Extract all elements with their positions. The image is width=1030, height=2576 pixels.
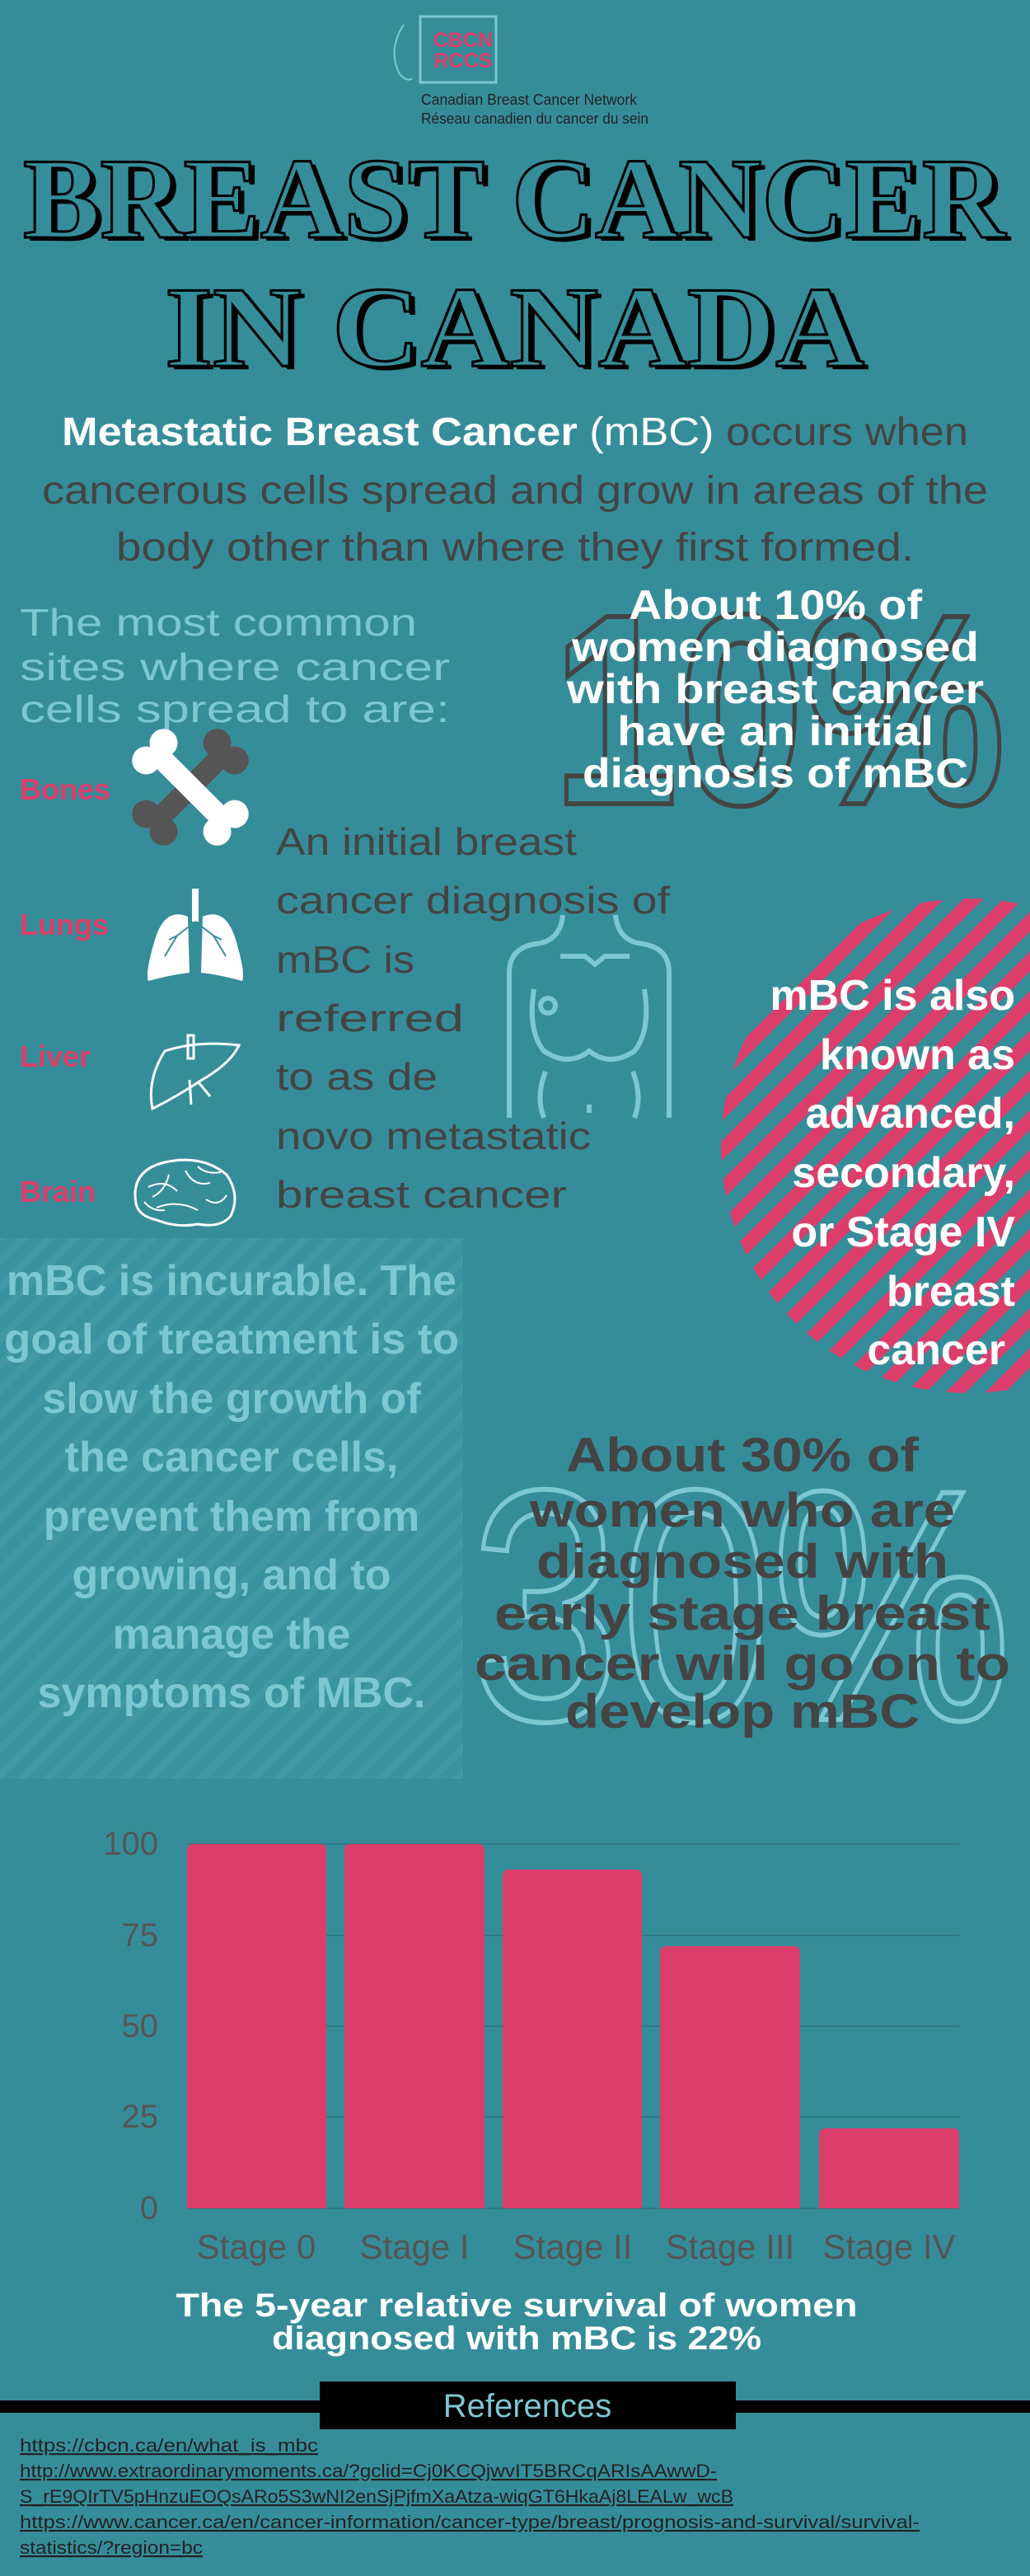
title [23,135,1012,395]
title: BREAST CANCER [28,138,1012,266]
bar chart: 50 [122,2008,158,2044]
common sites heading: cells spread to are: [20,687,450,730]
bar chart [103,1826,959,2266]
icon: liver [151,1035,239,1109]
icon: torso outline [509,915,669,1118]
references list [20,2435,920,2558]
panel: incurable: the cancer cells, [65,1433,398,1481]
logo: Canadian Breast Cancer Network [421,91,638,108]
bar chart: 0 [140,2190,158,2226]
panel: incurable: mBC is incurable. The [7,1257,456,1305]
bar chart: 75 [122,1917,158,1954]
intro text [42,411,988,570]
references list: http://www.extraordinarymoments.ca/?gclid=Cj0KCQjwvIT5BRCqARIsAAwwD- [20,2461,717,2481]
bar chart: Stage IV [822,2227,956,2266]
title: IN CANADA [170,267,869,395]
references list: https://cbcn.ca/en/what_is_mbc [20,2435,318,2456]
30% callout text [475,1429,1010,1738]
intro text: Metastatic Breast Cancer (mBC) occurs when [62,411,968,454]
bar chart: 25 [122,2099,158,2135]
de novo text: An initial breast [276,820,577,863]
striped circle with also-known-as text [721,899,1030,1393]
striped circle with also-known-as text: mBC is also [770,972,1015,1020]
logo: CBCN [433,29,493,52]
intro text: cancerous cells spread and grow in areas of the [42,469,988,513]
logo: RCCS [434,49,492,73]
de novo text: to as de [276,1055,438,1098]
striped circle with also-known-as text: cancer [867,1326,1005,1374]
de novo text: breast cancer [276,1173,567,1216]
de novo text: cancer diagnosis of [276,879,670,922]
30% callout text: diagnosed with [536,1535,948,1588]
common sites heading: The most common [20,601,417,644]
de novo text: novo metastatic [276,1114,591,1157]
panel: incurable: symptoms of MBC. [38,1669,425,1717]
common sites heading [20,601,450,730]
panel: incurable: slow the growth of [42,1375,421,1423]
bar chart: Stage 0 [197,2227,316,2266]
de novo text: mBC is [276,938,414,981]
chart caption [176,2287,857,2357]
10% callout text: About 10% of [629,582,922,628]
de novo text: referred [276,997,464,1039]
logo: Réseau canadien du cancer du sein [421,110,648,127]
icon: bones [126,723,255,852]
references list: https://www.cancer.ca/en/cancer-information/cancer-type/breast/prognosis-and-survival/survival- [20,2512,920,2532]
10% callout text: women diagnosed [571,624,979,670]
chart caption: The 5-year relative survival of women [176,2287,857,2324]
chart caption: diagnosed with mBC is 22% [272,2320,761,2357]
striped circle with also-known-as text: advanced, [806,1090,1015,1138]
panel: incurable [0,1238,463,1779]
panel: incurable: growing, and to [72,1551,391,1599]
panel: incurable: goal of treatment is to [4,1316,459,1363]
references heading [0,2381,1030,2429]
de novo text [276,820,670,1216]
bar chart: Stage I [359,2227,470,2266]
bar chart: Stage III [666,2227,794,2266]
10% callout text: have an initial [617,708,934,754]
logo [395,16,648,127]
common sites heading: sites where cancer [20,645,450,688]
bar chart: 100 [103,1826,158,1862]
30% callout text: About 30% of [566,1429,920,1482]
30% callout text: develop mBC [565,1685,920,1738]
striped circle with also-known-as text: known as [820,1031,1015,1079]
label: Brain: Brain [20,1175,96,1208]
bar chart: Stage II [513,2227,632,2266]
panel: incurable: prevent them from [44,1493,419,1541]
title: BREAST CANCER [23,135,1007,263]
intro text: body other than where they first formed. [116,526,914,570]
10% callout text: with breast cancer [566,666,984,712]
label: Liver: Liver [20,1039,91,1073]
10% callout text: diagnosis of mBC [583,750,968,796]
striped circle with also-known-as text: secondary, [792,1149,1015,1197]
label: Lungs: Lungs [20,908,109,941]
label: Bones: Bones [20,772,110,806]
title: IN CANADA [165,264,864,392]
30% callout text: early stage breast [494,1587,990,1640]
30% callout text: women who are [529,1484,955,1537]
references heading: References [443,2388,611,2424]
30% callout text: cancer will go on to [475,1637,1010,1691]
icon: lungs [147,889,243,981]
references list: statistics/?region=bc [20,2537,203,2558]
references list: S_rE9QIrTV5pHnzuEOQsARo5S3wNI2enSjPjfmXaAtza-wiqGT6HkaAj8LEALw_wcB [20,2486,733,2507]
striped circle with also-known-as text: or Stage IV [791,1208,1015,1256]
panel: incurable: manage the [113,1611,350,1659]
10% callout text [566,582,984,796]
icon: brain [135,1160,235,1226]
striped circle with also-known-as text: breast [887,1268,1015,1316]
